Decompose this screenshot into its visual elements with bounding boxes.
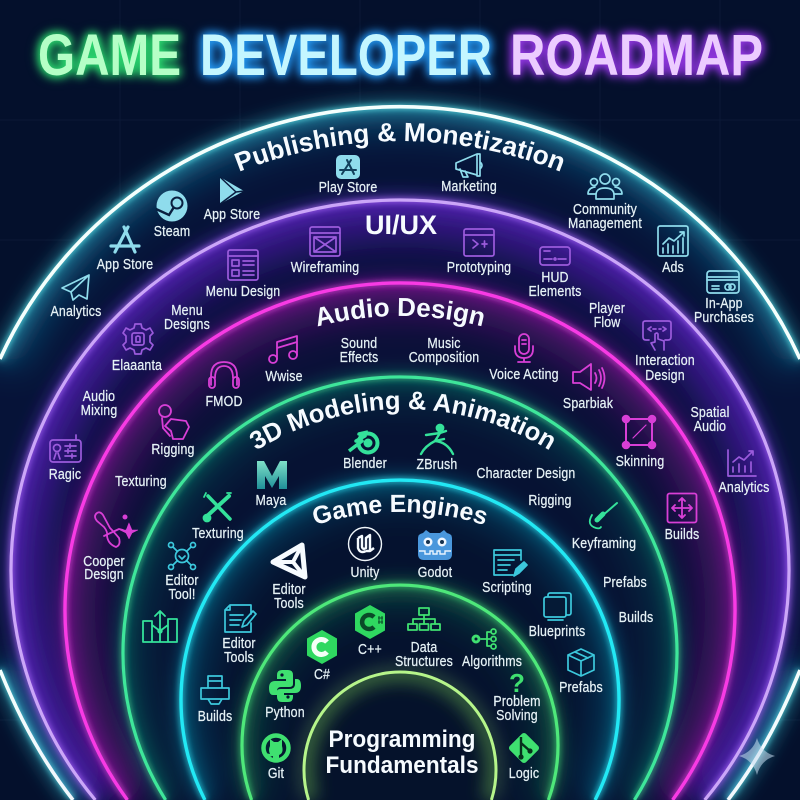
item: Community Management [568, 174, 642, 231]
item: Cooper Design: Design [84, 566, 124, 582]
item: HUD Elements [529, 247, 582, 299]
item: Blender: Blender [343, 455, 387, 471]
item: Marketing: Marketing [441, 178, 497, 194]
item: Analytics (plane icon): Analytics [50, 303, 102, 319]
panel: 3D Modeling & Animation [142, 392, 653, 643]
item: Sound Effects: Effects [340, 349, 378, 365]
item: Analytics: Analytics [718, 479, 770, 495]
heading: Programming Fundamentals: Programming [328, 726, 476, 753]
item: HUD Elements: HUD [541, 269, 569, 285]
item: Builds: Builds [198, 708, 232, 724]
item: ZBrush: ZBrush [417, 456, 457, 472]
item: Rigging: Rigging [151, 441, 195, 457]
item: Menu Designs: Designs [164, 316, 210, 332]
item: App Store (A icon) [97, 227, 153, 272]
item: Voice Acting: Voice Acting [489, 366, 559, 382]
item: Prototyping: Prototyping [447, 259, 511, 275]
item: Keyframing: Keyframing [572, 535, 636, 551]
ring: 3D modeling (green) [123, 377, 677, 800]
item: C++: C++ [358, 641, 382, 657]
heading: UI/UX: UI/UX [365, 210, 437, 240]
heading: Programming Fundamentals [326, 726, 478, 779]
item: Play Store: Play Store [319, 179, 377, 195]
item: Scripting [482, 550, 532, 595]
item: Godot: Godot [418, 564, 452, 580]
item: Logic: Logic [509, 765, 539, 781]
item: Ads: Ads [662, 259, 684, 275]
item: Ragic [49, 435, 81, 482]
item: Algorithms [462, 629, 522, 669]
item: Rigging: Rigging [528, 492, 572, 508]
icon: sparkle watermark [739, 738, 775, 775]
item: Skinning: Skinning [616, 453, 664, 469]
item: Community Management: Management [568, 215, 642, 231]
item: Sound Effects [340, 335, 378, 365]
ring: programming fundamentals (lime) [304, 672, 496, 800]
item: Logic [508, 732, 540, 781]
item: Wwise: Wwise [265, 368, 303, 384]
item: ZBrush [417, 424, 457, 472]
item: Cooper Design: Cooper [83, 553, 125, 569]
item: Spatial Audio: Spatial [690, 404, 730, 420]
item: Blueprints [529, 593, 585, 639]
item: Music Composition: Composition [409, 349, 479, 365]
title word: GAME: GAME [38, 23, 181, 88]
item: Blueprints: Blueprints [529, 623, 585, 639]
item: Sparbiak [563, 364, 613, 411]
item: Menu Designs: Menu [171, 302, 203, 318]
item: Ads [658, 226, 688, 275]
item: App Store (A icon): App Store [97, 256, 153, 272]
item: Analytics (plane icon) [50, 275, 102, 319]
item: Player Flow: Flow [594, 314, 621, 330]
item: Editor Tools (Unity logo) [272, 545, 306, 611]
item: Analytics [718, 450, 770, 495]
title [38, 23, 763, 88]
item: Python: Python [265, 704, 305, 720]
item: Menu Design [206, 250, 280, 299]
item: Builds [665, 494, 699, 542]
item: Wireframing [291, 227, 359, 275]
item: Editor Tool!: Editor [165, 572, 199, 588]
item: Prototyping [447, 229, 511, 275]
item: Play Store [319, 155, 377, 195]
item: Godot [418, 530, 452, 580]
item: Data Structures: Data [411, 639, 438, 655]
item: Elaaanta [112, 324, 162, 373]
item: Spatial Audio: Audio [694, 418, 726, 434]
item: Problem Solving [493, 668, 541, 723]
item: In-App Purchases: In-App [705, 295, 743, 311]
item: Data Structures: Structures [395, 653, 453, 669]
heading: 3D Modeling & Animation: 3D Modeling & Animation [250, 392, 554, 450]
item: Steam: Steam [154, 223, 190, 239]
item: Maya [256, 461, 287, 508]
item: In-App Purchases [694, 271, 754, 325]
item: Git (GitHub mark) [264, 736, 288, 781]
item: Prefabs [559, 649, 603, 695]
item: Problem Solving: ? [509, 668, 525, 698]
item: Rigging [151, 405, 195, 457]
item: Problem Solving: Solving [496, 707, 538, 723]
item: Audio Mixing: Audio [83, 388, 115, 404]
item: Editor Tools [222, 605, 256, 665]
item: Editor Tool! [165, 542, 199, 602]
panel: Publishing & Monetization [50, 122, 754, 325]
item: Spatial Audio [690, 404, 730, 434]
item: HUD Elements: Elements [529, 283, 582, 299]
item: Editor Tool!: Tool! [169, 586, 196, 602]
item: Texturing: Texturing [115, 473, 167, 489]
item: C# [307, 630, 337, 682]
icon: growth chart [143, 611, 177, 642]
item: Community Management: Community [573, 201, 637, 217]
item: Menu Design: Menu Design [206, 283, 280, 299]
item: Prefabs: Prefabs [559, 679, 603, 695]
item: Python [265, 670, 305, 720]
item: Voice Acting [489, 334, 559, 382]
heading: Audio Design: Audio Design [318, 298, 484, 327]
panel: Game Engines [198, 494, 603, 724]
ring: UI/UX (purple) [11, 200, 789, 800]
item: Wwise [265, 336, 303, 384]
item: Music Composition [409, 335, 479, 365]
heading: Programming Fundamentals: Fundamentals [326, 752, 478, 779]
heading: Game Engines: Game Engines [313, 494, 486, 524]
ring: audio (magenta) [65, 283, 735, 800]
item: FMOD: FMOD [205, 393, 243, 409]
panel: Languages and Algorithms [264, 605, 541, 781]
item: C#: C# [314, 666, 330, 682]
item: Marketing [441, 154, 497, 194]
item: App Store (play icon) [204, 177, 260, 222]
item: Elaaanta: Elaaanta [112, 357, 162, 373]
panel: Audio Design [83, 298, 699, 582]
item: Editor Tools (Unity logo): Tools [274, 595, 304, 611]
item: Editor Tools (Unity logo): Editor [272, 581, 306, 597]
item: Player Flow [589, 300, 625, 330]
item: Ragic: Ragic [49, 466, 81, 482]
item: Cooper Design [83, 512, 138, 582]
item: App Store (play icon): App Store [204, 206, 260, 222]
item: Texturing [192, 493, 244, 541]
item: Character Design: Character Design [477, 465, 575, 481]
item: Texturing: Texturing [192, 525, 244, 541]
item: Data Structures [395, 608, 453, 669]
item: Unity (Unreal logo) [348, 528, 382, 580]
item: Editor Tools: Editor [222, 635, 256, 651]
item: Builds: Builds [665, 526, 699, 542]
item: Audio Mixing [81, 388, 117, 418]
item: Git (GitHub mark): Git [268, 765, 284, 781]
item: Menu Designs [164, 302, 210, 332]
title word: DEVELOPER: DEVELOPER [200, 23, 492, 88]
item: In-App Purchases: Purchases [694, 309, 754, 325]
item: Audio Mixing: Mixing [81, 402, 117, 418]
item: Interaction Design [635, 321, 695, 383]
panel: UI/UX [49, 210, 770, 495]
item: Scripting: Scripting [482, 579, 532, 595]
item: Sparbiak: Sparbiak [563, 395, 613, 411]
item: Maya: Maya [256, 492, 287, 508]
item: Music Composition: Music [427, 335, 461, 351]
item: C++ [355, 605, 385, 657]
item: Prefabs: Prefabs [603, 574, 647, 590]
item: Interaction Design: Interaction [635, 352, 695, 368]
item: Skinning [616, 416, 664, 469]
heading: Publishing & Monetization: Publishing & Monetization [234, 122, 564, 172]
item: Unity (Unreal logo): Unity [350, 564, 380, 580]
item: Editor Tools: Tools [224, 649, 254, 665]
item: Algorithms: Algorithms [462, 653, 522, 669]
item: Builds [198, 676, 232, 724]
item: Sound Effects: Sound [341, 335, 377, 351]
ring: languages (green) [242, 585, 558, 800]
item: Builds: Builds [619, 609, 653, 625]
item: Steam [154, 190, 190, 239]
item: Player Flow: Player [589, 300, 625, 316]
item: Interaction Design: Design [645, 367, 685, 383]
item: Blender [343, 432, 387, 471]
item: Keyframing [572, 503, 636, 551]
item: Problem Solving: Problem [493, 693, 541, 709]
item: Wireframing: Wireframing [291, 259, 359, 275]
item: FMOD [205, 362, 243, 409]
ring: game engines (cyan) [181, 480, 619, 800]
